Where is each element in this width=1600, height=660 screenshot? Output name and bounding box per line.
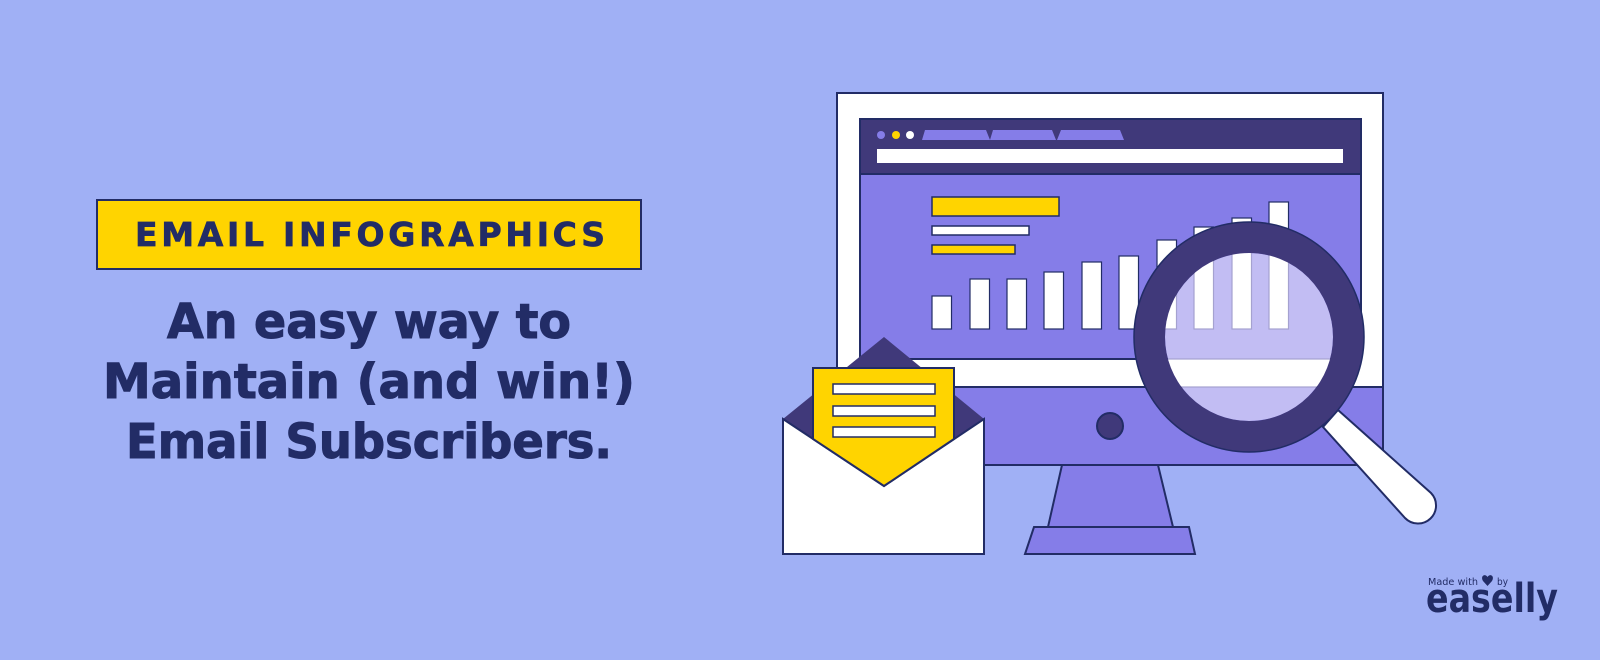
monitor frame [837,93,1383,387]
headline text [103,294,635,470]
browser toolbar [860,119,1361,174]
bar chart [932,202,1288,329]
illustration: computer monitor [837,93,1383,554]
envelope body [783,419,984,554]
yellow letter [813,368,954,486]
icon: heart [1482,575,1493,586]
page title bars [932,197,1059,254]
headline text: An easy way to [167,294,571,350]
browser window content [860,174,1361,359]
magnifier handle [1323,410,1436,524]
headline text: Email Subscribers. [126,414,612,470]
magnifier lens [1165,253,1333,421]
heading banner: EMAIL INFOGRAPHICS [97,200,641,269]
heading banner: EMAIL INFOGRAPHICS: EMAIL INFOGRAPHICS [135,215,605,254]
headline text: Maintain (and win!) [103,354,635,410]
monitor base panel with button [837,387,1383,465]
icon: magnifying glass [1134,202,1436,524]
magnifier ring [1150,238,1348,436]
monitor stand [1025,465,1195,554]
logo: Made with love by easelly: easelly [1426,576,1558,622]
logo: Made with love by easelly: by [1497,577,1508,588]
infographic canvas [96,92,1558,620]
logo: Made with love by easelly: Made with [1428,577,1478,588]
envelope flap [783,337,984,486]
icon: open envelope with letter [783,337,984,554]
